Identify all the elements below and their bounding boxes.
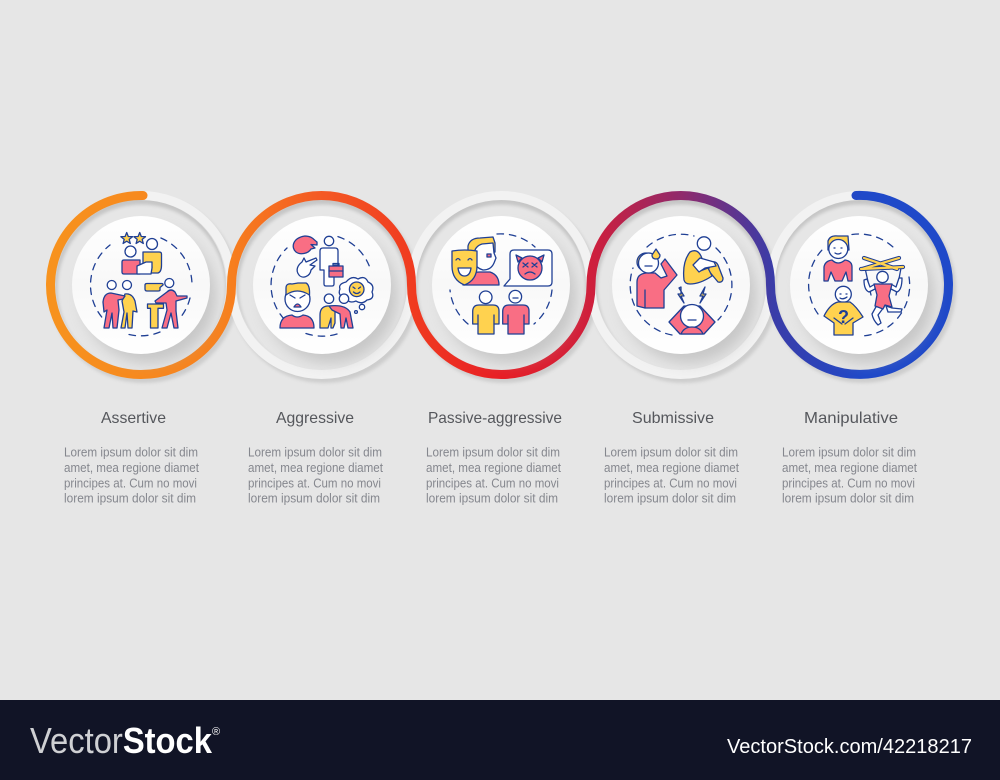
- text block: Assertive: lorem ipsum dolor sit dim: [64, 492, 196, 506]
- registered mark: ®: [212, 726, 220, 738]
- icon: aggressive: [271, 236, 373, 336]
- text block: Aggressive: amet, mea regione diamet: [248, 461, 383, 475]
- white discs: [72, 216, 928, 354]
- text block: Manipulative: principes at. Cum no movi: [782, 476, 915, 490]
- footer bar: [0, 700, 1000, 780]
- text block: Manipulative: lorem ipsum dolor sit dim: [782, 492, 914, 506]
- text block: Assertive: amet, mea regione diamet: [64, 461, 199, 475]
- title: Assertive: Assertive: [101, 410, 166, 427]
- title: Passive-aggressive: Passive-aggressive: [428, 410, 562, 427]
- text block: Submissive: principes at. Cum no movi: [604, 476, 737, 490]
- text block: Passive-aggressive: lorem ipsum dolor sit dim: [426, 492, 558, 506]
- footer image id: VectorStock.com/42218217: [727, 736, 972, 758]
- text block: Aggressive: principes at. Cum no movi: [248, 476, 381, 490]
- text block: Passive-aggressive: principes at. Cum no movi: [426, 476, 559, 490]
- text block: Assertive: principes at. Cum no movi: [64, 476, 197, 490]
- icon: assertive: [90, 232, 192, 336]
- disc shadows: [82, 229, 934, 363]
- text block: Manipulative: Lorem ipsum dolor sit dim: [782, 446, 916, 460]
- title: Submissive: Submissive: [632, 410, 714, 427]
- text block: Aggressive: Lorem ipsum dolor sit dim: [248, 446, 382, 460]
- text block: Submissive: amet, mea regione diamet: [604, 461, 739, 475]
- icon: passive-aggressive: [450, 234, 552, 334]
- text block: Submissive: Lorem ipsum dolor sit dim: [604, 446, 738, 460]
- text block: Manipulative: amet, mea regione diamet: [782, 461, 917, 475]
- title: Aggressive: Aggressive: [276, 410, 354, 427]
- icon: manipulative: [809, 234, 910, 336]
- text block: Passive-aggressive: Lorem ipsum dolor sit dim: [426, 446, 560, 460]
- icon: manipulative: ?: [838, 307, 849, 327]
- text block: Submissive: lorem ipsum dolor sit dim: [604, 492, 736, 506]
- ribbon outer shadow: [54, 199, 951, 378]
- footer logo: VectorStock: [30, 720, 213, 761]
- title: Manipulative: Manipulative: [804, 410, 898, 427]
- text block: Passive-aggressive: amet, mea regione diamet: [426, 461, 561, 475]
- text block: Assertive: Lorem ipsum dolor sit dim: [64, 446, 198, 460]
- coloured gradient ribbon: [50, 195, 948, 374]
- icon: submissive: [630, 234, 732, 335]
- recessed rings: [56, 200, 944, 372]
- text block: Aggressive: lorem ipsum dolor sit dim: [248, 492, 380, 506]
- light track ribbon: [141, 195, 859, 374]
